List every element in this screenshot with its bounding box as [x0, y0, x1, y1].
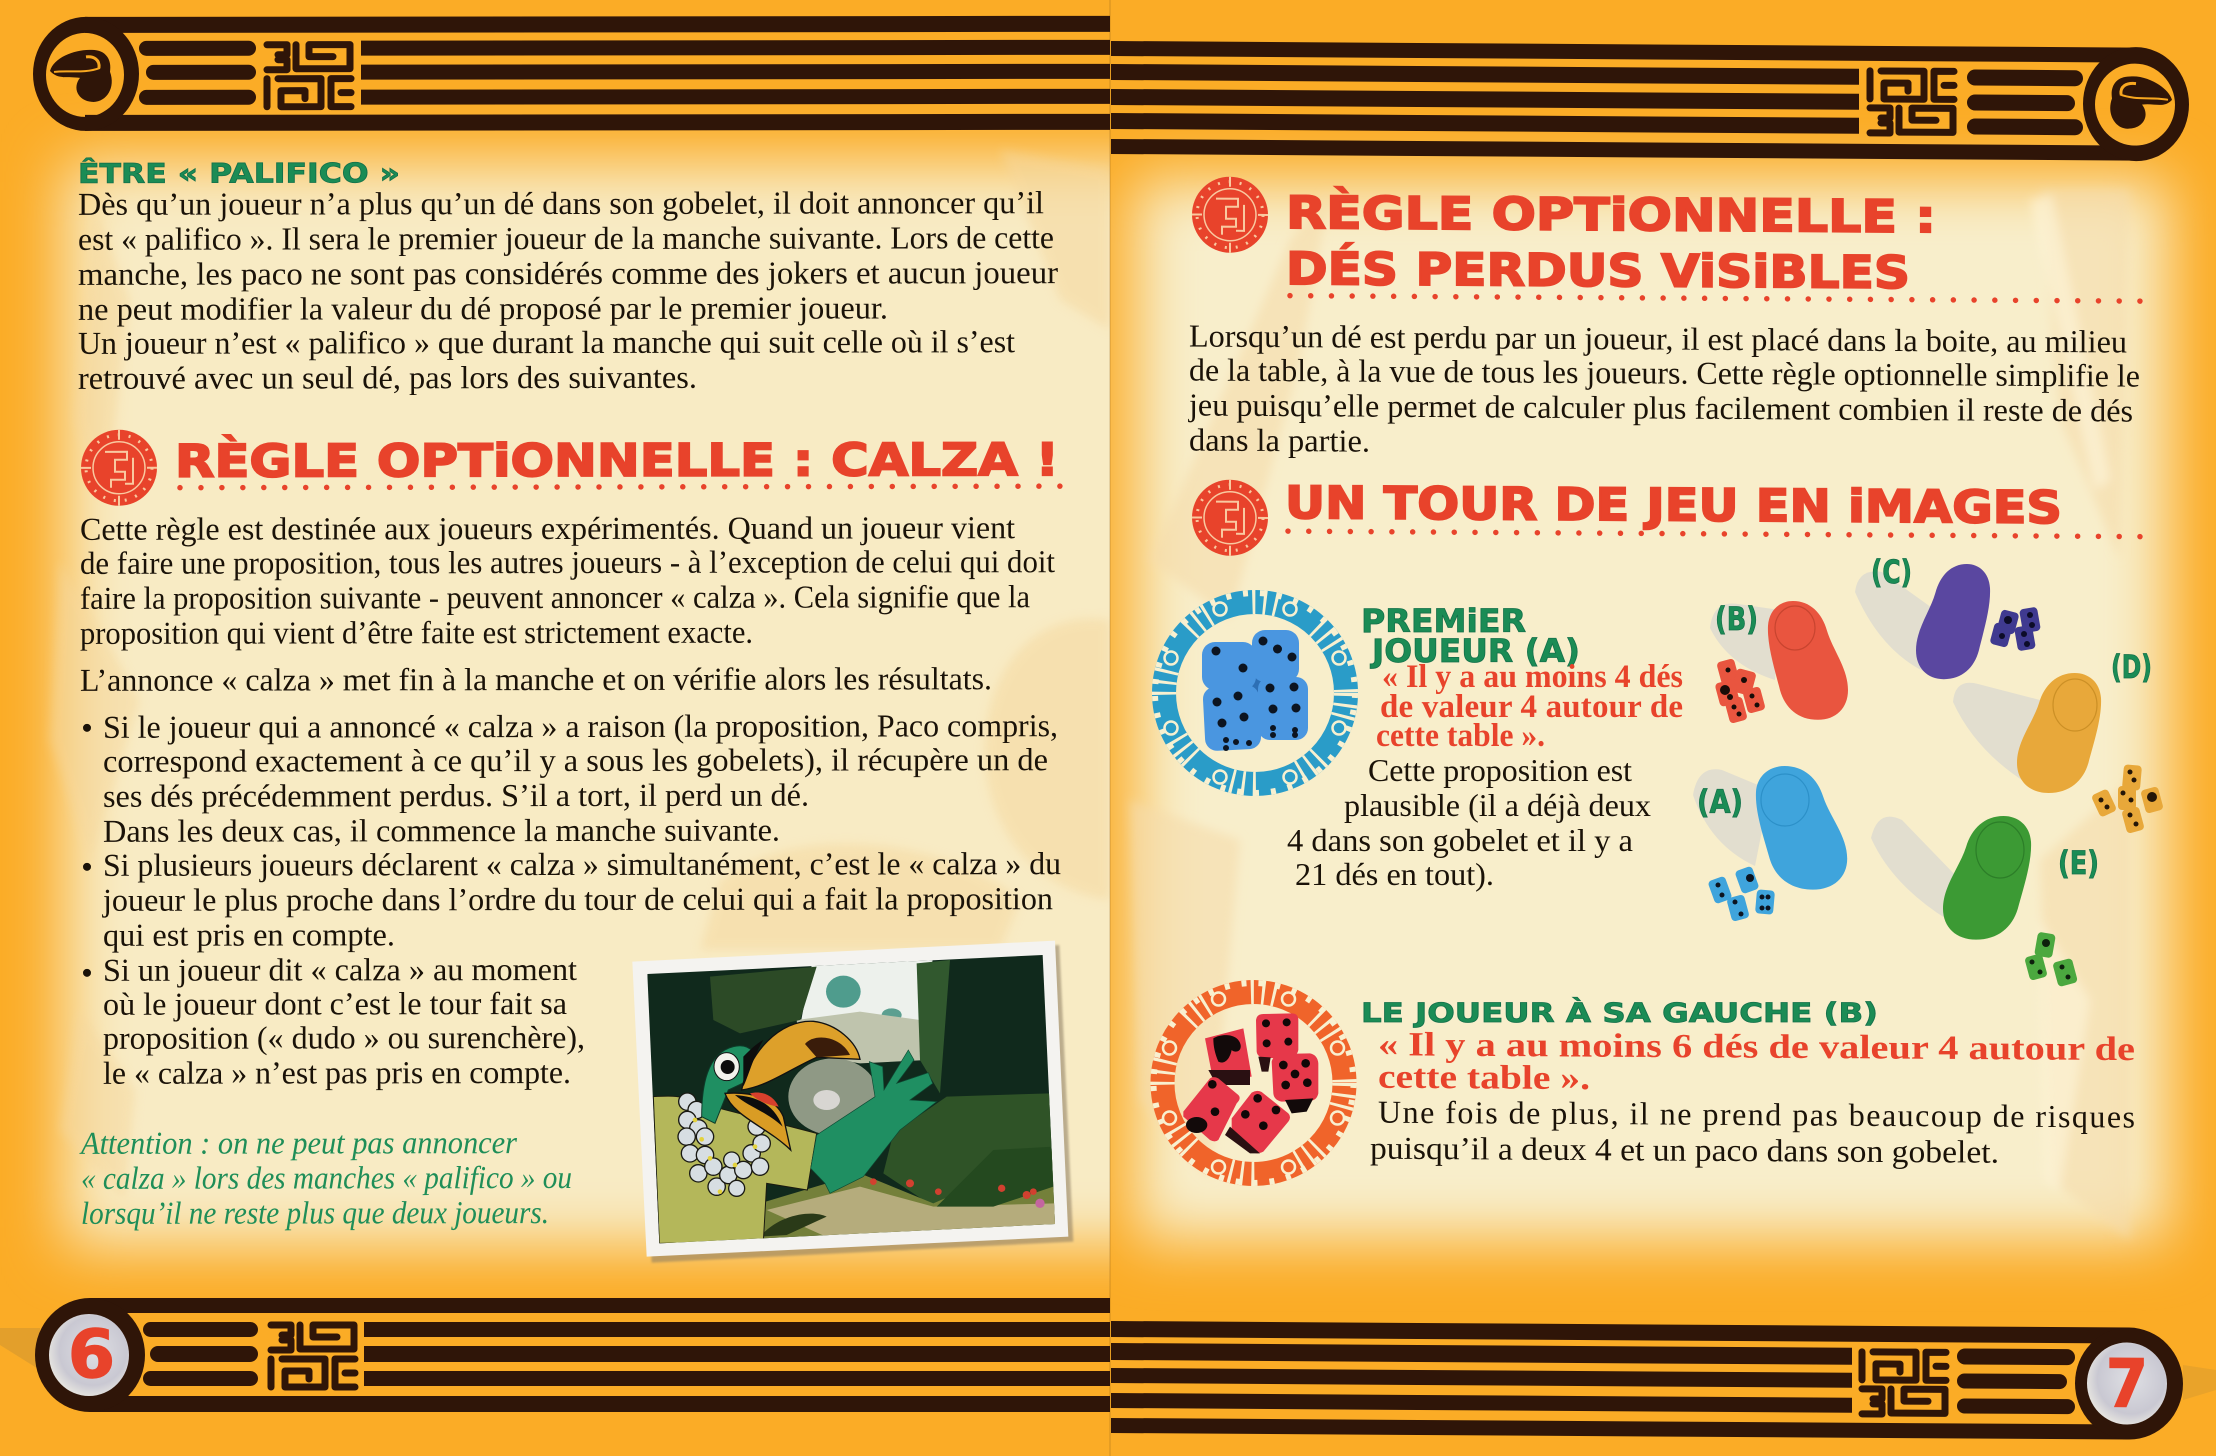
icon: toucan head right: [2110, 76, 2172, 129]
right bottom band: [1111, 1321, 2183, 1440]
text block: dés perdus: Lorsqu’un dé est perdu par un joueur, il est placé dans la boite, au milieu: [1189, 317, 2127, 360]
heading: premier joueur: [1361, 602, 1580, 670]
bullet list: ses dés précédemment perdus. S’il a tort, il perd un dé.: [103, 777, 809, 814]
text block: explanation: plausible (il a déjà deux: [1344, 787, 1651, 823]
text block: palifico: manche, les paco ne sont pas considérés comme des jokers et aucun joueur: [78, 254, 1058, 292]
quote and explanation: Une fois de plus, il ne prend pas beaucoup de risques: [1378, 1094, 2135, 1135]
cup labels: (D): [2111, 648, 2152, 686]
dotted rule: [180, 486, 1060, 488]
text block: dés perdus: jeu puisqu’elle permet de calculer plus facilement combien il reste de dés: [1188, 386, 2133, 429]
text block: palifico: Un joueur n’est « palifico » que durant la manche qui suit celle où il s’est: [78, 323, 1015, 361]
cup labels: [1697, 553, 2152, 882]
text block: calza intro: de faire une proposition, tous les autres joueurs - à l’exception de celui qui doit: [80, 543, 1055, 581]
bullet list: qui est pris en compte.: [103, 916, 395, 953]
text block: calza intro: L’annonce « calza » met fin à la manche et on vérifie alors les résultats.: [80, 660, 992, 698]
bullet list: Si plusieurs joueurs déclarent « calza » simultanément, c’est le « calza » du: [103, 845, 1061, 883]
panel: premier joueur: [1155, 593, 1683, 892]
cup C purple: [1916, 564, 1990, 679]
callout: attention: Attention : on ne peut pas annoncer: [79, 1124, 518, 1161]
text block: dés perdus: de la table, à la vue de tous les joueurs. Cette règle optionnelle simplifie le: [1189, 351, 2140, 394]
icon: red dice ring: [1154, 983, 1354, 1183]
text block: palifico: retrouvé avec un seul dé, pas lors des suivantes.: [78, 359, 697, 396]
dotted rule: [1288, 531, 2140, 537]
quote and explanation: puisqu’il a deux 4 et un paco dans son gobelet.: [1370, 1130, 1999, 1170]
text block: palifico: Dès qu’un joueur n’a plus qu’un dé dans son gobelet, il doit annoncer qu’il: [78, 184, 1044, 222]
quote: premier joueur: « Il y a au moins 4 dés: [1382, 659, 1683, 695]
text block: explanation: 21 dés en tout).: [1295, 856, 1494, 892]
cup labels: (E): [2058, 844, 2099, 882]
bullet list: [83, 707, 1061, 1091]
page number disc 6: [49, 1314, 129, 1396]
heading: règle optionnelle dés perdus: RÈGLE OPTiONNELLE :: [1286, 186, 1936, 243]
quote and explanation: cette table ».: [1378, 1059, 1590, 1097]
icon: medallion calza: [81, 430, 157, 506]
text block: explanation: [1287, 752, 1651, 892]
heading: le joueur à sa gauche: LE JOUEUR À SA GAUCHE (B): [1361, 997, 1878, 1029]
bullet list: le « calza » n’est pas pris en compte.: [103, 1054, 571, 1091]
text block: palifico: ne peut modifier la valeur du dé proposé par le premier joueur.: [78, 289, 888, 327]
dotted rule: [1290, 296, 2140, 301]
heading: règle optionnelle dés perdus: [1286, 186, 1936, 299]
toucan head: [702, 1046, 757, 1123]
callout: attention: [79, 1124, 572, 1231]
left top band: [33, 16, 1110, 131]
text block: explanation: Cette proposition est: [1368, 752, 1632, 788]
toucan arm: [811, 1050, 937, 1193]
cup B red: [1768, 601, 1848, 720]
text block: dés perdus: dans la partie.: [1189, 421, 1370, 459]
text block: calza intro: Cette règle est destinée aux joueurs expérimentés. Quand un joueur vient: [80, 509, 1015, 547]
bullet list: joueur le plus proche dans l’ordre du tour de celui qui a fait la proposition: [102, 880, 1053, 918]
dice A blue: [1707, 866, 1775, 922]
icon: meander left top: [267, 45, 351, 107]
cup D yellow: [2017, 673, 2101, 793]
heading: un tour de jeu en images: UN TOUR DE JEU EN iMAGES: [1285, 476, 2062, 534]
lei: [678, 1093, 770, 1196]
diagram: cups and dice around the table: [1693, 553, 2164, 987]
cup A blue: [1756, 766, 1847, 890]
bullet list: proposition (« dudo » ou surenchère),: [103, 1019, 585, 1056]
page number disc 7: 7: [2106, 1345, 2148, 1423]
bullet list: correspond exactement à ce qu’il y a sous les gobelets), il récupère un de: [103, 741, 1048, 779]
heading: premier joueur: PREMiER: [1361, 602, 1526, 640]
panel: left page content: [78, 156, 1061, 1231]
heading: être palifico: ÊTRE « PALIFICO »: [78, 157, 400, 190]
photo: toucan in garden: [632, 941, 1073, 1263]
icon: medallion rule: [1192, 176, 1268, 253]
icon: medallion tour: [1192, 479, 1268, 556]
icon: toucan head left: [50, 50, 112, 102]
left bottom band: [35, 1298, 1110, 1412]
cup E green: [1943, 816, 2031, 940]
quote and explanation: « Il y a au moins 6 dés de valeur 4 autour de: [1378, 1026, 2135, 1068]
dice C purple: [1989, 607, 2041, 651]
icon: meander right bottom: [1862, 1352, 1946, 1414]
icon: blue dice ring: [1155, 593, 1355, 793]
page number disc 7: [2087, 1342, 2167, 1425]
quote: premier joueur: [1376, 659, 1683, 754]
bullet list: Dans les deux cas, il commence la manche suivante.: [103, 812, 780, 849]
bullet list: où le joueur dont c’est le tour fait sa: [103, 985, 567, 1022]
dice B red: [1714, 658, 1766, 724]
text block: dés perdus: [1188, 317, 2140, 464]
bullet list: Si le joueur qui a annoncé « calza » a raison (la proposition, Paco compris,: [103, 707, 1058, 745]
page number disc 6: 6: [68, 1316, 115, 1393]
dice D yellow: [2091, 764, 2164, 834]
heading: règle optionnelle dés perdus: DÉS PERDUS ViSiBLES: [1286, 242, 1910, 299]
icon: meander right top: [1870, 71, 1954, 133]
callout: attention: « calza » lors des manches « palifico » ou: [81, 1159, 572, 1196]
heading: règle optionnelle calza: RÈGLE OPTiONNELLE : CALZA !: [175, 433, 1059, 488]
text block: calza intro: faire la proposition suivante - peuvent annoncer « calza ». Cela signifie que la: [80, 578, 1030, 616]
icon: meander left bottom: [271, 1325, 355, 1387]
text block: calza intro: [80, 509, 1055, 698]
text block: explanation: 4 dans son gobelet et il y a: [1287, 822, 1633, 858]
toucan shirt: [653, 1096, 817, 1243]
text block: palifico: est « palifico ». Il sera le premier joueur de la manche suivante. Lors de cette: [78, 219, 1054, 257]
quote: premier joueur: cette table ».: [1376, 718, 1545, 754]
cup labels: (B): [1715, 600, 1758, 638]
cup labels: (C): [1871, 553, 1912, 591]
cup labels: (A): [1697, 783, 1743, 821]
toucan beak: [725, 1093, 791, 1150]
cup shadows: [1693, 571, 2040, 920]
bullet list: Si un joueur dit « calza » au moment: [103, 951, 577, 988]
quote and explanation: [1370, 1026, 2135, 1171]
text block: calza intro: proposition qui vient d’être faite est strictement exacte.: [80, 614, 753, 651]
callout: attention: lorsqu’il ne reste plus que deux joueurs.: [81, 1194, 549, 1231]
heading: premier joueur: JOUEUR (A): [1370, 632, 1580, 670]
right top band: [1111, 40, 2189, 161]
dice E green: [2024, 932, 2078, 987]
panel: right page content: [1188, 176, 2140, 562]
panel: joueur à sa gauche: [1154, 983, 2135, 1183]
text block: palifico: [78, 184, 1058, 396]
quote: premier joueur: de valeur 4 autour de: [1380, 689, 1683, 725]
